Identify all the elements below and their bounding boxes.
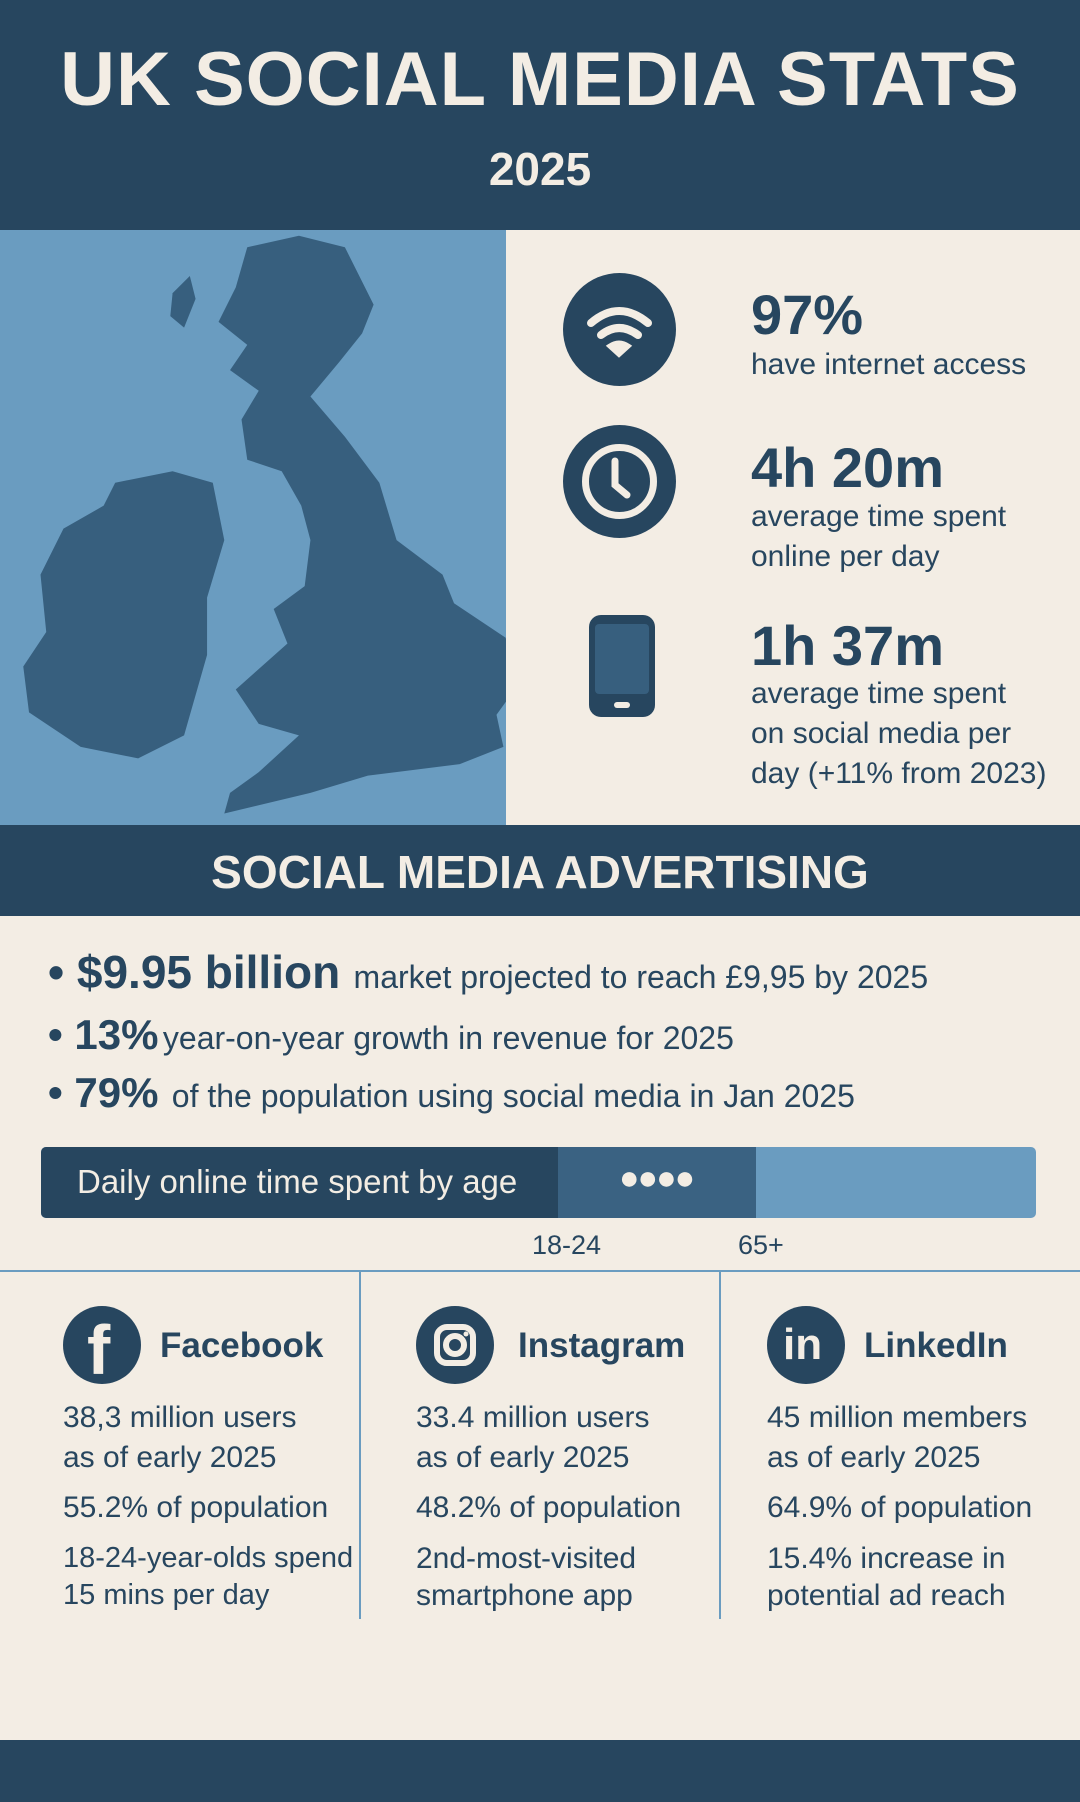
stat: time online <box>563 425 1006 573</box>
subtitle year: 2025 <box>489 143 591 195</box>
icon: facebook <box>63 1306 141 1384</box>
panel: linkedin: as of early 2025 <box>767 1441 980 1474</box>
icon: facebook: f <box>87 1311 110 1389</box>
stat: time online: 4h 20m <box>751 436 944 499</box>
stat: internet access: 97% <box>751 283 863 346</box>
panel: linkedin: 64.9% of population <box>767 1491 1032 1524</box>
panel: linkedin: LinkedIn <box>864 1326 1008 1365</box>
panel: facebook: 38,3 million users <box>63 1401 296 1434</box>
panel: linkedin: 15.4% increase in <box>767 1542 1005 1575</box>
map panel <box>0 230 506 825</box>
age labels: 18-24 <box>532 1230 601 1260</box>
panel: instagram: smartphone app <box>416 1579 633 1612</box>
icon: linkedin <box>767 1306 845 1384</box>
panel: facebook: 15 mins per day <box>63 1579 269 1611</box>
panel: instagram: 33.4 million users <box>416 1401 649 1434</box>
icon: linkedin: in <box>783 1320 822 1369</box>
panel: instagram: 48.2% of population <box>416 1491 681 1524</box>
panel: facebook <box>63 1306 353 1611</box>
stat: social media time: average time spent <box>751 677 1006 710</box>
stat: social media time: on social media per <box>751 717 1011 750</box>
panel: instagram: 2nd-most-visited <box>416 1542 636 1575</box>
stat: internet access: have internet access <box>751 348 1026 381</box>
icon: phone <box>589 615 655 717</box>
panel: facebook: Facebook <box>160 1326 323 1365</box>
panel: linkedin: potential ad reach <box>767 1579 1006 1612</box>
map: great britain <box>23 182 515 814</box>
footer <box>0 1740 1080 1802</box>
stat: time online: online per day <box>751 540 939 573</box>
age bar chart: Daily online time spent by age <box>77 1163 517 1200</box>
panel: instagram: Instagram <box>518 1326 685 1365</box>
age bar chart: ●●●● <box>619 1159 693 1197</box>
panel: instagram <box>416 1306 685 1612</box>
section header: advertising: SOCIAL MEDIA ADVERTISING <box>211 846 869 898</box>
bullet list <box>48 946 928 1116</box>
text: 65+ <box>738 1230 784 1260</box>
header <box>0 0 1080 230</box>
age bar chart <box>41 1147 1036 1218</box>
stat: social media time <box>589 614 1046 790</box>
section header: advertising <box>0 825 1080 916</box>
stat: social media time: 1h 37m <box>751 614 944 677</box>
bullet list: • 79% of the population using social media in Jan 2025 <box>48 1069 855 1116</box>
panel: facebook: 55.2% of population <box>63 1491 328 1524</box>
panel: linkedin <box>767 1306 1032 1612</box>
stat: time online: average time spent <box>751 500 1006 533</box>
icon: clock <box>563 425 676 538</box>
icon: wifi <box>563 273 676 386</box>
bullet list: • 13% year-on-year growth in revenue for 2025 <box>48 1011 734 1058</box>
stat: internet access <box>563 273 1026 386</box>
panel: linkedin: 45 million members <box>767 1401 1027 1434</box>
panel: instagram: as of early 2025 <box>416 1441 629 1474</box>
bullet list: • $9.95 billion market projected to reach £9,95 by 2025 <box>48 946 928 998</box>
title: UK SOCIAL MEDIA STATS <box>60 37 1020 122</box>
stat: social media time: day (+11% from 2023) <box>751 757 1046 790</box>
panel: facebook: 18-24-year-olds spend <box>63 1542 353 1574</box>
panel: facebook: as of early 2025 <box>63 1441 276 1474</box>
icon: instagram <box>416 1306 494 1384</box>
